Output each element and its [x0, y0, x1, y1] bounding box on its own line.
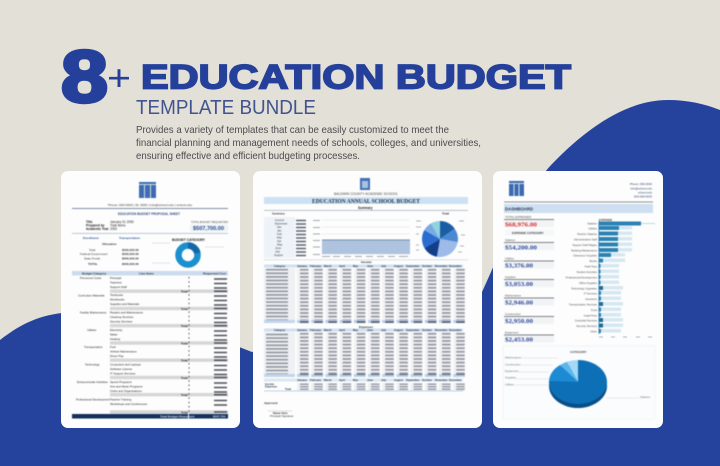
expenses heading: Expenses — [359, 325, 373, 329]
bar chart: expense: Insurance — [585, 297, 597, 301]
area chart — [313, 220, 410, 256]
expenses table: December — [449, 328, 462, 332]
budget table rows: Facility Maintenance — [80, 310, 107, 314]
category stats: $2,950.00 — [505, 318, 533, 325]
budget table rows: Arts and Music Programs — [110, 384, 143, 388]
approval signature: Name Here — [273, 411, 288, 415]
table header: Budget Category — [82, 272, 106, 276]
budget table rows: Cleaning Services — [110, 315, 134, 319]
panel: dashboard: Utilities — [505, 256, 515, 260]
description: financial planning and management needs of schools, colleges, and universities, — [136, 138, 481, 149]
budget table rows: Extracurricular Activities — [77, 380, 108, 384]
budget table rows: Sports Programs — [110, 380, 132, 384]
sheet metadata: January 01 2050 — [110, 220, 134, 224]
net summary table: Expenses — [265, 384, 278, 388]
budget table rows: Total — [181, 307, 188, 311]
net summary table: June — [367, 378, 374, 382]
net summary table: Income — [265, 382, 275, 386]
budget table rows: Workshops and Conferences — [110, 402, 148, 406]
budget table rows: Support Staff — [110, 285, 127, 289]
panel: dashboard — [493, 171, 663, 428]
school name: BALDWIN COUNTY ACADEMIC SCHOOL — [334, 192, 398, 196]
pie chart: category: Equipment — [505, 369, 519, 373]
bar chart: expense: Student Activities — [577, 270, 598, 274]
pie chart: category — [503, 346, 655, 419]
expenses table: May — [353, 328, 359, 332]
approval signature: Approved: — [264, 401, 278, 405]
net summary table: November — [435, 378, 448, 382]
bar chart: expense: Security Services — [576, 324, 598, 328]
icon: school logo — [139, 182, 156, 198]
budget table rows — [76, 276, 228, 414]
budget table rows: Total — [181, 393, 188, 397]
budget table rows: Water — [110, 332, 118, 336]
budget table rows: Heating — [110, 337, 120, 341]
pie chart: total: Total — [442, 212, 449, 216]
net summary table: December — [449, 378, 462, 382]
bar chart: expense: Books — [590, 259, 598, 263]
budget table rows: Utilities — [87, 328, 97, 332]
pie chart: category: Maintenance — [505, 356, 521, 360]
total budget box: $507,700.00 — [193, 226, 224, 232]
bar chart: expense: Office Supplies — [579, 281, 598, 285]
income heading: Income — [361, 260, 372, 264]
budget table rows: Teachers — [110, 280, 122, 284]
category stats: $54,200.00 — [505, 244, 537, 252]
heading: education budget: EDUCATION BUDGET — [141, 58, 571, 96]
summary list: Feb — [277, 232, 282, 236]
net summary table: September — [406, 378, 419, 382]
table footer total: $507,700 — [213, 414, 226, 418]
funding summary — [80, 236, 140, 266]
panel: dashboard: Supplies — [505, 275, 516, 279]
panel: dashboard: Maintenance — [505, 294, 521, 298]
summary list: Expenses — [275, 222, 288, 226]
category stats: $3,053.00 — [505, 281, 533, 288]
net summary table: May — [353, 378, 359, 382]
pie chart: category: Supplies — [505, 376, 516, 380]
budget table rows: Principal — [110, 276, 121, 280]
bar chart: expense: Technology Upgrades — [571, 286, 598, 290]
funding summary: $000,000.00 — [122, 252, 139, 256]
summary list: Net — [277, 225, 282, 229]
expenses table: August — [394, 328, 403, 332]
sheet metadata: Prepared by — [86, 224, 105, 228]
table header — [72, 271, 228, 276]
funding summary: TOTAL — [88, 262, 98, 266]
budget table rows: Teacher Training — [110, 398, 132, 402]
pie chart: category: CATEGORY — [570, 350, 587, 354]
budget table rows: Driver Pay — [110, 354, 124, 358]
funding summary: $000,000.00 — [122, 256, 139, 260]
expenses table: October — [422, 328, 432, 332]
bar chart: expense: Support Staff Wages — [572, 243, 598, 247]
panel: budget proposal sheet — [61, 171, 240, 428]
expenses table: June — [367, 328, 374, 332]
sheet metadata: Title — [86, 220, 93, 224]
budget table rows: Total — [181, 410, 188, 414]
plus sign: + — [107, 57, 131, 98]
net summary table: Total — [285, 387, 291, 391]
net summary table: August — [394, 378, 403, 382]
contact details: 000-000-0000 — [634, 194, 652, 198]
income table: June — [367, 264, 374, 268]
contact details: Phone: 000-0000 — [630, 182, 652, 186]
funding summary: $000,000.00 — [122, 262, 139, 266]
expenses table — [264, 328, 465, 377]
pie chart: category: Construction — [505, 362, 521, 366]
budget table rows: Transportation — [84, 345, 103, 349]
summary list: July — [275, 250, 281, 254]
blue wave shape — [0, 100, 720, 466]
sheet metadata: Total Items — [110, 224, 126, 228]
income table — [264, 264, 465, 323]
expenses table: September — [406, 328, 419, 332]
expenses table: March — [324, 328, 332, 332]
icon: school logo — [509, 181, 524, 196]
expenses table: February — [310, 328, 322, 332]
icon: school logo — [360, 178, 370, 190]
budget table rows: Technology — [85, 362, 100, 366]
bar chart: expense: Classroom Supplies — [573, 254, 598, 258]
budget table rows: Workbooks — [110, 298, 125, 302]
table footer total: Total Budget Requested — [160, 414, 194, 418]
budget table rows: Software License — [110, 367, 133, 371]
summary heading: Summary — [358, 206, 373, 210]
budget table rows: IT Support Services — [110, 372, 136, 376]
expenses table: Category — [274, 328, 286, 332]
summary list: June — [275, 246, 282, 250]
budget table rows: Computers and Laptops — [110, 362, 141, 366]
bar chart: expense: Custodial Services — [575, 318, 598, 322]
table footer total — [72, 414, 228, 418]
funding summary: $000,000.00 — [122, 248, 139, 252]
pie chart: category: Utilities — [505, 382, 515, 386]
funding summary: Total — [89, 248, 96, 252]
budget table rows: Textbooks — [110, 293, 124, 297]
bar chart: expense: Utilities — [588, 226, 598, 230]
bar chart: expense: Salaries — [587, 222, 598, 226]
income table: October — [422, 264, 432, 268]
income table: December — [449, 264, 462, 268]
expense category button — [505, 230, 554, 236]
bar chart: expense: Field Trips — [585, 264, 598, 268]
net summary table: October — [422, 378, 432, 382]
income table: February — [310, 264, 322, 268]
bar chart: expense: Legal Fees — [584, 314, 598, 318]
budget table rows: Total — [181, 290, 188, 294]
big number 8: 8 — [61, 37, 108, 118]
pie chart: category: Salaries — [640, 395, 651, 399]
expenses table: April — [339, 328, 345, 332]
bar chart: expense: EXPENSE — [599, 218, 612, 222]
budget table rows: Total — [181, 341, 188, 345]
summary list: Mar — [277, 236, 282, 240]
total expenses stat: $68,976.00 — [505, 222, 537, 228]
bar chart: expense: Food — [591, 308, 597, 312]
budget table rows: Total — [181, 324, 188, 328]
category stats: $2,453.00 — [505, 336, 533, 344]
title band: EDUCATION ANNUAL SCHOOL BUDGET — [312, 198, 421, 205]
funding summary: Transportation — [119, 236, 140, 240]
funding summary: Allocation — [102, 242, 117, 246]
panel: dashboard: Construction — [505, 312, 521, 316]
income table: September — [406, 264, 419, 268]
budget table rows: Fuel — [110, 345, 116, 349]
income table: July — [381, 264, 387, 268]
pie chart: total — [416, 212, 465, 257]
summary list: Jan — [277, 228, 282, 232]
budget table rows: Security Services — [110, 320, 133, 324]
dashboard band — [504, 204, 653, 213]
budget table rows: Curriculum Materials — [78, 294, 105, 298]
budget table rows: Personnel Costs — [80, 276, 102, 280]
bar chart: expense: IT Services — [584, 292, 598, 296]
summary list: August — [274, 253, 283, 257]
funding summary: State Funds — [84, 256, 101, 260]
income table: Category — [274, 264, 286, 268]
panel: dashboard: Equipment — [505, 330, 519, 334]
table header: Line Items — [139, 272, 154, 276]
contact details: info@school.edu — [630, 186, 652, 190]
funding summary: Federal Government — [80, 252, 108, 256]
total expenses stat — [504, 215, 554, 228]
bar chart: expense: Professional Development — [566, 276, 597, 280]
budget table rows: Supplies and Materials — [110, 302, 140, 306]
budget table rows: Clubs and Organizations — [110, 389, 142, 393]
income table: November — [435, 264, 448, 268]
donut chart: budget category — [152, 238, 224, 264]
bar chart: expense: Teacher Salaries — [577, 232, 598, 236]
income table: August — [394, 264, 403, 268]
total budget box: TOTAL BUDGET REQUESTED — [191, 220, 228, 224]
income table: May — [353, 264, 359, 268]
sheet metadata: Academic Year — [86, 227, 109, 231]
category stats: $3,376.00 — [505, 262, 533, 270]
description: Provides a variety of templates that can be easily customized to meet the — [136, 125, 449, 136]
sheet metadata — [86, 220, 134, 231]
budget table rows: Total — [181, 358, 188, 362]
net summary table: March — [324, 378, 332, 382]
sheet title: EDUCATION BUDGET PROPOSAL SHEET — [118, 212, 181, 216]
donut chart: budget category: BUDGET CATEGORY — [172, 238, 206, 242]
panel: annual school budget — [253, 171, 482, 428]
net summary table — [264, 378, 465, 391]
panel: dashboard: Salaries — [505, 238, 516, 242]
income table: March — [324, 264, 332, 268]
budget table rows: Electricity — [110, 328, 123, 332]
budget table rows: Repairs and Maintenance — [110, 310, 143, 314]
contact line: Phone: 000-0000 | ID: 0000 | info@school.edu | school.edu — [108, 203, 192, 207]
bar chart: expense — [566, 218, 655, 337]
net summary table: February — [310, 378, 322, 382]
bar chart: expense: Transportation Services — [569, 302, 598, 306]
table header: Requested Cost — [203, 272, 226, 276]
net summary table: January — [297, 378, 308, 382]
title band — [264, 197, 468, 205]
funding summary: Enrollment — [83, 236, 99, 240]
expenses table: January — [297, 328, 308, 332]
bar chart: expense: Other — [590, 330, 597, 334]
expenses table: November — [435, 328, 448, 332]
summary list: Apr — [277, 239, 281, 243]
total budget box — [190, 220, 228, 232]
expenses table: July — [381, 328, 387, 332]
income table: January — [297, 264, 308, 268]
approval signature — [264, 401, 294, 418]
net summary table: July — [381, 378, 387, 382]
subheading: TEMPLATE BUNDLE — [136, 97, 316, 119]
summary list: Summary — [272, 212, 285, 216]
budget table rows: Professional Development — [76, 398, 110, 402]
net summary table: April — [339, 378, 345, 382]
summary list: May — [277, 242, 283, 246]
approval signature: Principal Signature — [270, 414, 294, 418]
contact details — [630, 182, 652, 198]
bar chart: expense: Building Maintenance — [571, 248, 598, 252]
bar chart: expense: Administrative Staff — [574, 238, 597, 242]
category stats: $2,946.00 — [505, 300, 533, 306]
sheet metadata: 2050 — [110, 227, 117, 231]
budget table rows: Total — [181, 376, 188, 380]
expense category button: EXPENSE CATEGORY — [512, 231, 544, 235]
title block — [61, 37, 571, 162]
summary list — [264, 212, 306, 258]
total expenses stat: TOTAL EXPENSES — [505, 215, 531, 219]
income table: April — [339, 264, 345, 268]
summary list: Income — [275, 218, 285, 222]
category stats — [504, 242, 554, 344]
dashboard band: DASHBOARD — [505, 206, 533, 212]
description: ensuring effective and efficient budgeting processes. — [136, 151, 360, 162]
budget table rows: Vehicle Maintenance — [110, 350, 137, 354]
contact details: school.edu — [638, 190, 652, 194]
description — [136, 125, 481, 162]
